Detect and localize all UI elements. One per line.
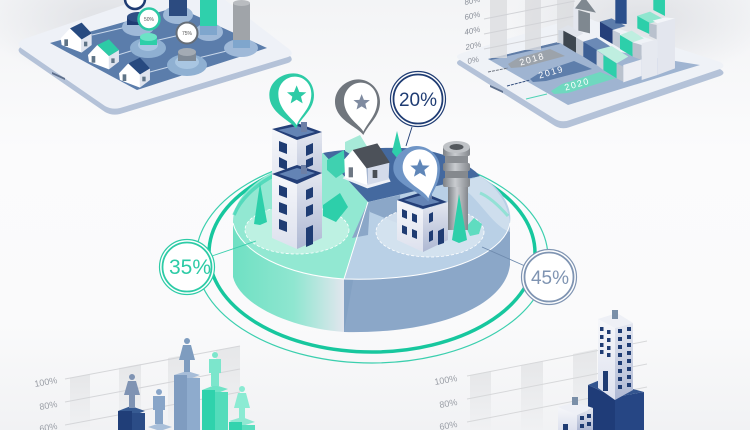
cylinder: grey short	[167, 48, 207, 76]
gem: blue plot	[466, 218, 482, 236]
icon: star	[353, 94, 370, 109]
figure: woman navy bar	[124, 374, 140, 408]
dashed plots	[245, 206, 484, 257]
cylinder: navy tall	[163, 0, 193, 24]
y axis labels: 60%	[464, 10, 481, 22]
figure: man teal bar	[209, 352, 221, 386]
tower: tall building	[598, 310, 633, 400]
icon: star	[287, 85, 306, 103]
lighter plots	[245, 206, 349, 254]
house: navy roof front	[119, 58, 150, 88]
stair blocks	[558, 0, 675, 82]
banner: 2019	[530, 61, 592, 82]
y axis labels: 20%	[464, 40, 482, 52]
row: 2020 teal steps	[597, 0, 665, 82]
house: teal roof	[88, 39, 119, 69]
grid backdrop	[467, 341, 647, 430]
rings around the pie	[196, 153, 548, 363]
gem: green plot	[323, 193, 348, 222]
pin: teal star	[269, 73, 314, 128]
tablet: houses and percent cylinders (top left)	[19, 0, 292, 115]
banner: 2018	[508, 49, 565, 68]
house on dark slice	[343, 143, 391, 188]
gems and trees on the pie	[254, 131, 482, 236]
banner: 2020: 2020	[563, 76, 591, 93]
gem: back teal	[345, 135, 368, 157]
pin: blue star	[393, 146, 440, 202]
badge: 50%	[138, 8, 160, 30]
connector lines to badges	[212, 127, 525, 266]
axis labels	[34, 375, 58, 430]
figure: woman small teal bar	[234, 386, 250, 419]
tablet: stepped bar chart with years (top right)	[457, 0, 724, 128]
house: navy roof	[61, 23, 92, 53]
cylinder: navy with 25% badge	[122, 12, 154, 36]
slice: 20% dark blue top	[323, 148, 480, 202]
badge: 20%: 20%	[399, 90, 437, 111]
cylinder: grey tall	[224, 0, 258, 57]
slice: 45% light blue top	[344, 176, 510, 279]
bar: small teal	[229, 417, 255, 430]
gem: back left teal	[327, 150, 345, 178]
building: small block	[397, 191, 448, 252]
axis labels: 100%	[434, 373, 458, 387]
badge: 75%: 75%	[182, 31, 193, 37]
badge: 20%	[390, 72, 446, 126]
badge: top cut off	[125, 0, 145, 9]
icon: star	[410, 159, 430, 177]
axis labels: 80%	[439, 397, 458, 410]
badge: 75%	[176, 22, 198, 44]
row: 2018 grey steps	[558, 0, 596, 57]
cylinder: teal short	[130, 33, 166, 58]
bar: steel blue	[174, 371, 200, 430]
dashed leader lines	[488, 68, 547, 99]
chart backdrop columns	[490, 0, 574, 58]
tower: cylinder chimney	[443, 141, 470, 243]
row: 2019 navy steps	[583, 0, 627, 65]
axis labels: 100%	[34, 375, 58, 389]
badge: 45%: 45%	[531, 268, 569, 289]
pie side: blue	[344, 223, 510, 332]
pin: grey star	[335, 79, 380, 135]
axis labels	[434, 373, 458, 430]
grid backdrop	[65, 346, 240, 430]
badge: 50%: 50%	[144, 17, 155, 23]
banner: 2019: 2019	[537, 64, 565, 81]
slice: 35% green top	[233, 153, 368, 279]
banner: 2020	[551, 72, 616, 94]
building: small	[558, 397, 593, 430]
tree: green plot	[254, 183, 267, 225]
3D pie chart	[233, 148, 510, 332]
grid lines	[484, 1, 575, 49]
figure: man pale bar	[153, 389, 165, 424]
y axis labels: 40%	[464, 25, 481, 37]
bar: teal	[202, 385, 228, 430]
badge: 35%	[160, 240, 214, 294]
figure: woman steel bar	[179, 338, 195, 372]
bar: pale blue	[148, 423, 172, 430]
chart: people bars (bottom left)	[34, 338, 255, 430]
cylinder: teal tall	[195, 0, 223, 41]
badge: 35%: 35%	[169, 256, 211, 279]
bar: navy	[118, 406, 145, 430]
axis labels: 80%	[39, 399, 58, 412]
pie side: green	[233, 223, 344, 332]
y axis labels: 0%	[467, 55, 480, 66]
chart: building bars (bottom right)	[434, 310, 647, 430]
y axis labels	[464, 0, 482, 66]
building: tall twin block	[272, 122, 322, 249]
tree: back	[392, 131, 402, 158]
white step stacks	[623, 17, 675, 82]
badge: 45%	[522, 250, 576, 304]
banner: 2018: 2018	[518, 51, 546, 68]
base: navy block	[588, 380, 644, 430]
